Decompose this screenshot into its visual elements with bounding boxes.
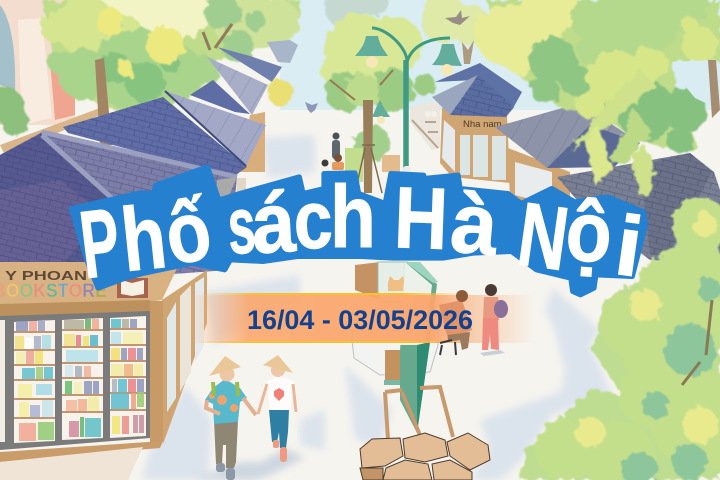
title letters: i [610,197,649,295]
title: Phố sách Hà Nội [71,167,649,299]
title letters: H [393,170,449,268]
title letters: P [74,187,126,299]
building top left [0,0,100,155]
icon: open book [117,278,148,298]
bookstore side wall [162,270,207,444]
centre tree canopy [319,0,490,161]
bookstore front [0,262,180,480]
planter frame [385,387,453,440]
title letters: s [226,181,258,272]
woman in conical hat [258,355,296,462]
roof middle left [63,91,266,177]
far kiosk seating [410,100,440,150]
date text: 16/04 - 03/05/2026 [247,305,473,335]
bird small [305,102,318,113]
roof front left [0,132,246,290]
right back roof [557,153,720,265]
title letters: ộ [563,183,615,281]
bird [445,10,470,25]
planter and bush base [330,70,400,182]
hexagonal benches [360,433,490,480]
yellow bush [267,79,293,105]
branch upper tree [203,24,232,50]
title letters: á [249,175,298,272]
back tree trunk [462,40,474,64]
title letters: c [292,174,334,267]
centre tree trunk with stakes [355,100,382,193]
title letters: ố [158,182,218,283]
man in conical hat [205,356,256,480]
lower right tree [520,197,720,480]
couple walking [198,355,305,480]
hanging leaf fronds [570,70,655,196]
right sky gap [672,60,716,108]
roof back left [190,57,268,172]
tree trunk left [95,58,112,145]
green information kiosk [400,262,438,433]
title blue cut-out shape [71,167,646,295]
right tree trunk [708,60,720,118]
tree canopies top left [0,0,386,136]
title letters: à [447,175,502,273]
kiosk Nha nam: Nha nam [463,119,502,130]
central cat sign and wood kiosk [352,262,438,385]
title letters: h [330,168,376,266]
book shelves [0,316,146,443]
people in the background [321,132,344,171]
title letters [74,168,649,299]
standing woman with backpack [480,284,508,356]
bookstore name upper row: Y PHOAN [5,268,87,283]
roof far back [217,40,298,82]
street lamp [355,28,462,180]
right kiosk [495,103,640,215]
lower right tree branches [682,300,712,385]
large tree top right [475,0,720,153]
couple shadow [198,448,305,480]
title letters: N [512,183,574,289]
title letters: h [117,187,171,291]
seated person [439,290,472,355]
kiosk Nha nam [432,63,522,183]
date banner [190,293,535,343]
